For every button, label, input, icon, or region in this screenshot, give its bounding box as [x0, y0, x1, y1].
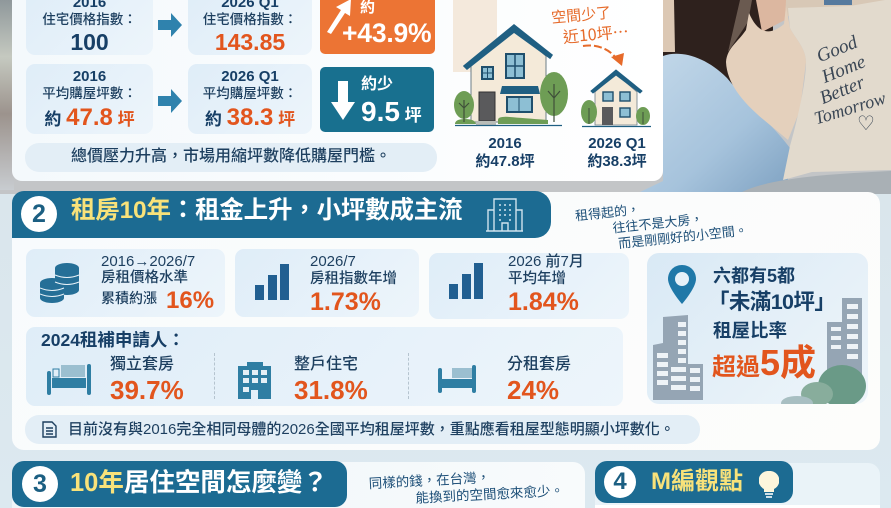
icon: bed: [438, 365, 476, 393]
pillow text: Home: [819, 51, 869, 88]
card: rent level: 2016→2026/7: [101, 253, 195, 270]
panel 3 heading: [12, 461, 347, 507]
icon: building: [238, 362, 271, 399]
panel 3: living space: [12, 462, 585, 508]
badge: 9.5 ping less: 9.5 坪: [361, 96, 422, 127]
card: six cities: 超過5成: [712, 342, 816, 383]
icon: bars: [449, 263, 483, 299]
icon: light bulb: [759, 471, 779, 498]
card: rent index yoy: 房租指數年增: [310, 271, 397, 287]
card: 2026 Q1 price index: [188, 0, 312, 55]
sweater: [726, 6, 806, 140]
handwritten note: less space: 能換到的空間愈來愈少。: [415, 479, 564, 507]
number badge 4: [604, 466, 636, 498]
pillow text: Tomorrow: [812, 88, 888, 128]
card: 2026 Q1 average size: 平均購屋坪數：: [203, 86, 297, 101]
card: 2024 subsidy applicants: 獨立套房: [110, 356, 174, 373]
handwritten note: less space: 同樣的錢，在台灣，: [368, 466, 491, 492]
top background sweater: [770, 0, 891, 16]
card: avg yoy: 1.84%: [508, 288, 579, 316]
note strip: [25, 415, 700, 444]
arrow: price index: [158, 13, 182, 37]
card: 2016 price index: 住宅價格指數：: [42, 12, 137, 27]
number badge 2: [21, 196, 57, 232]
badge: 9.5 ping less: [320, 67, 434, 132]
card: rent index yoy: 2026/7: [310, 253, 356, 270]
card: 2016 average size: 約 47.8 坪: [44, 104, 135, 131]
label: 2026 Q1 house: 約38.3坪: [587, 153, 647, 170]
icon: document: [42, 421, 57, 438]
card: 2016 price index: [26, 0, 153, 55]
card: six cities: 租屋比率: [713, 320, 787, 341]
sofa: [742, 171, 891, 194]
card: rent index yoy: [235, 249, 419, 317]
handwritten note: rent: 而是剛剛好的小空間。: [617, 220, 749, 252]
arrow: average size: [158, 89, 182, 113]
tan backdrop: [453, 0, 497, 72]
panel 4: editor view: [595, 463, 880, 508]
jeans: [640, 54, 790, 192]
handwritten note: rent: 往往不是大房，: [612, 208, 704, 237]
card: 2026 Q1 price index: 143.85: [215, 29, 285, 55]
card: six cities: 六都有5都: [713, 266, 795, 286]
handwritten note: rent: [574, 199, 749, 252]
label: 2026 Q1 house: 2026 Q1: [588, 135, 646, 152]
card: rent level: 房租價格水準: [101, 270, 188, 286]
pillow text: Good: [814, 32, 861, 67]
handwritten note: space less: 近10坪…: [562, 18, 629, 48]
label: 2016 house: 約47.8坪: [475, 153, 535, 170]
panel 2: renting: [12, 192, 880, 450]
pillow: [783, 0, 891, 180]
number badge 3: 3: [33, 470, 47, 498]
pillow text: [812, 32, 888, 135]
panel 2 heading: 租房10年：租金上升，小坪數成主流: [71, 197, 462, 224]
number badge 3: [22, 466, 58, 502]
skin: [756, 0, 786, 32]
icon: small house: [581, 69, 651, 128]
label: 2016 house: [475, 135, 535, 170]
summary strip: 總價壓力升高，市場用縮坪數降低購屋門檻。: [71, 148, 391, 165]
icon: large house: [454, 24, 568, 126]
background photo: [0, 0, 891, 194]
number badge 4: 4: [613, 468, 627, 495]
card: 2024 subsidy applicants: 39.7%: [110, 375, 184, 405]
badge: +43.9%: +43.9%: [342, 18, 431, 48]
card: avg yoy: 平均年增: [508, 271, 566, 287]
panel 4 inner box: [595, 505, 880, 508]
card: 2016 price index: 100: [70, 29, 109, 55]
card: 2024 subsidy applicants: 分租套房: [507, 356, 571, 373]
illustration: buildings and trees: [653, 298, 866, 404]
panel 2 heading: [12, 191, 551, 238]
handwritten note: space less: 空間少了: [550, 2, 612, 28]
card: 2026 Q1 average size: 約 38.3 坪: [205, 104, 295, 131]
card: avg yoy: [429, 253, 629, 319]
sweater left sliver: [663, 0, 675, 52]
icon: coins: [40, 263, 79, 303]
label: 2016 house: 2016: [488, 135, 522, 152]
note strip: 目前沒有與2016完全相同母體的2026全國平均租屋坪數，重點應看租屋型態明顯小坪數化。: [68, 421, 675, 438]
card: rent level: [26, 249, 225, 317]
card: rent level: 16%: [166, 287, 214, 314]
badge: +43.9%: [320, 0, 435, 54]
icon: bars: [255, 264, 289, 300]
hair: [663, 0, 773, 85]
pillow text: Better: [817, 72, 868, 109]
badge: 9.5 ping less: 約少: [361, 76, 393, 93]
panel 1: buying: [12, 0, 663, 181]
handwritten note: rent: 租得起的，: [574, 199, 641, 224]
card: 2024 subsidy applicants: 24%: [507, 375, 559, 405]
arrow: dashed note arrow: [582, 44, 624, 66]
card: 2024 subsidy applicants: 整戶住宅: [294, 356, 358, 373]
summary strip: [25, 143, 437, 172]
card: 2024 subsidy applicants: [26, 327, 623, 406]
card: 2016 average size: 2016: [73, 68, 106, 85]
card: 2026 Q1 price index: 住宅價格指數：: [203, 12, 297, 27]
card: 2016 average size: [26, 64, 153, 134]
card: 2026 Q1 average size: 2026 Q1: [221, 68, 279, 85]
card: 2024 subsidy applicants: 2024租補申請人：: [41, 330, 185, 350]
card: avg yoy: 2026 前7月: [508, 253, 584, 270]
pillow text: ♡: [857, 113, 875, 135]
number badge 2: 2: [32, 200, 46, 228]
panel 4 heading: M編觀點: [651, 468, 743, 495]
card: 2016 average size: 平均購屋坪數：: [42, 86, 137, 101]
card: six cities: 「未滿10坪」: [708, 290, 835, 314]
panel 3 heading: 10年居住空間怎麼變？: [70, 469, 328, 497]
card: six cities: [647, 253, 868, 404]
handwritten note: space less: [550, 2, 629, 48]
label: 2026 Q1 house: [587, 135, 647, 170]
handwritten note: less space: [368, 466, 564, 507]
icon: location pin: [668, 265, 696, 304]
panel 4 heading: [595, 461, 793, 503]
card: 2024 subsidy applicants: 31.8%: [294, 375, 368, 405]
icon: bed: [47, 364, 91, 395]
card: rent level: 累積約漲: [101, 290, 157, 306]
card: rent index yoy: 1.73%: [310, 288, 381, 316]
card: 2026 Q1 average size: [188, 64, 312, 134]
